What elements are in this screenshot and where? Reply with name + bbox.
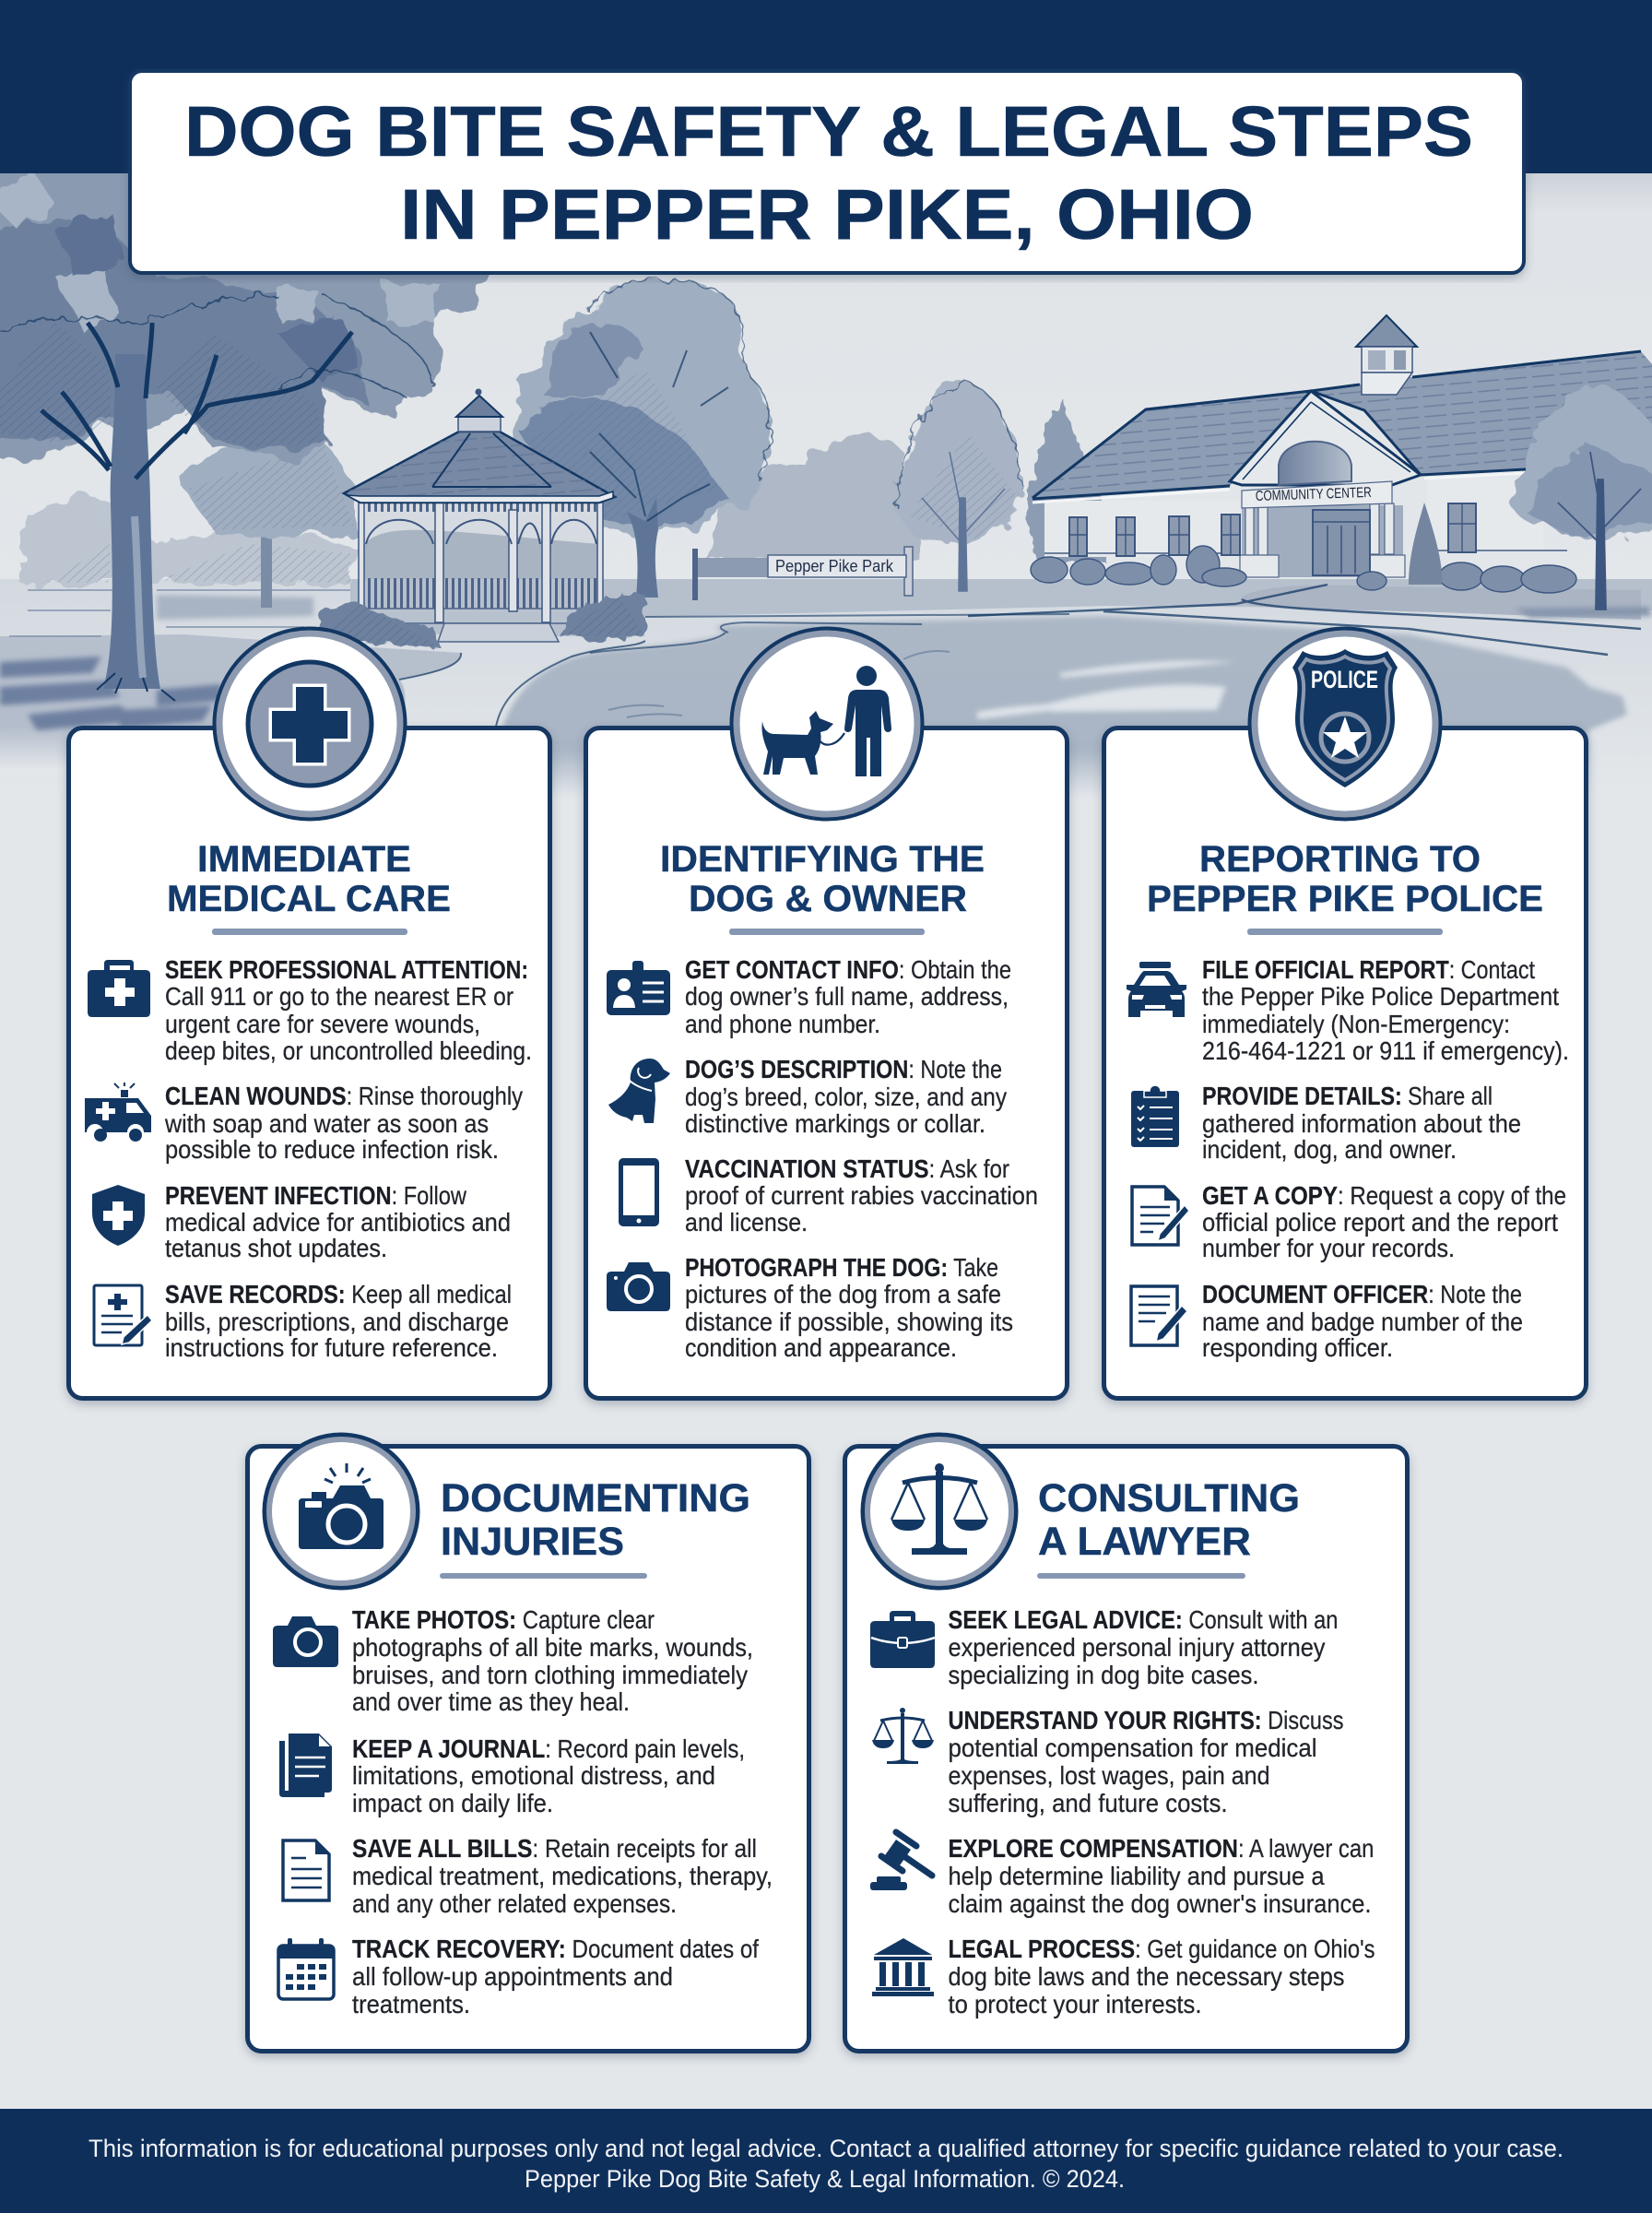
panel: immediate medical care [68, 629, 549, 1398]
item: seek professional attention: SEEK PROFESSIONAL ATTENTION: [165, 955, 528, 984]
item: take photos [273, 1605, 753, 1716]
item: legal process [872, 1935, 1375, 2018]
park sign [692, 547, 913, 600]
item: provide details: PROVIDE DETAILS: Share all [1202, 1082, 1493, 1110]
item: seek legal advice: experienced personal injury attorney [948, 1633, 1326, 1662]
item: save all bills: and any other related expenses. [352, 1889, 677, 1918]
icon: person walking dog badge [732, 629, 922, 819]
item: dog's description [608, 1055, 1007, 1138]
item: explore compensation: help determine liability and pursue a [948, 1862, 1325, 1890]
item: legal process: LEGAL PROCESS: Get guidance on Ohio's [948, 1935, 1375, 1963]
far trees and bushes [20, 397, 1106, 584]
item: document officer: DOCUMENT OFFICER: Note the [1202, 1280, 1522, 1308]
item: dog's description: DOG’S DESCRIPTION: Note the [685, 1055, 1002, 1083]
heading: MEDICAL CARE [167, 879, 451, 919]
item: photograph the dog [607, 1253, 1013, 1362]
heading [660, 839, 985, 935]
item: take photos: photographs of all bite marks, wounds, [352, 1633, 753, 1662]
item: seek legal advice [870, 1605, 1339, 1689]
item: file official report: the Pepper Pike Police Department [1202, 982, 1559, 1011]
heading: A LAWYER [1038, 1520, 1251, 1564]
item: seek professional attention: deep bites, or uncontrolled bleeding. [165, 1036, 532, 1065]
item: keep a journal: limitations, emotional distress, and [352, 1761, 715, 1790]
item: seek professional attention: urgent care for severe wounds, [165, 1010, 480, 1038]
item: clean wounds: with soap and water as soon as [164, 1109, 489, 1138]
panel: reporting to pepper pike police [1104, 629, 1586, 1398]
item: save all bills [283, 1834, 773, 1918]
icon: medical cross badge [215, 629, 405, 819]
item: get a copy: number for your records. [1202, 1234, 1455, 1262]
item: dog's description: distinctive markings or collar. [685, 1109, 985, 1138]
item: save records: SAVE RECORDS: Keep all medical [165, 1280, 512, 1308]
heading: REPORTING TO [1199, 839, 1481, 880]
item: keep a journal: KEEP A JOURNAL: Record pain levels, [352, 1734, 745, 1763]
gazebo [344, 389, 615, 642]
item: take photos: TAKE PHOTOS: Capture clear [352, 1605, 655, 1634]
item: legal process: dog bite laws and the necessary steps [948, 1962, 1344, 1991]
item: save all bills: medical treatment, medications, therapy, [352, 1862, 773, 1890]
header band [0, 0, 1652, 173]
item: save records: instructions for future reference. [165, 1333, 498, 1362]
item: file official report: immediately (Non-Emergency: [1202, 1010, 1510, 1038]
item: understand your rights: expenses, lost wages, pain and [948, 1761, 1270, 1790]
item: seek professional attention [88, 955, 532, 1065]
item: dog's description: dog’s breed, color, size, and any [685, 1083, 1007, 1111]
large center tree [514, 279, 772, 598]
item: vaccination status: and license. [685, 1208, 808, 1237]
icon: camera badge [265, 1435, 418, 1588]
shrubs around the building [1031, 503, 1576, 593]
item: save all bills: SAVE ALL BILLS: Retain receipts for all [352, 1834, 757, 1863]
item: clean wounds [85, 1082, 523, 1164]
icon: police badge: POLICE [1311, 666, 1378, 693]
item: clean wounds: CLEAN WOUNDS: Rinse thoroughly [165, 1082, 523, 1110]
item: track recovery: all follow-up appointments and [352, 1962, 673, 1991]
ground: lawns, road and paths [0, 579, 1652, 802]
icon: police badge [1250, 629, 1440, 819]
tree behind gazebo [184, 432, 355, 608]
footer: This information is for educational purposes only and not legal advice. Contact a qualified attorney for specific guidance related to your case. [88, 2135, 1564, 2162]
heading [440, 1476, 750, 1579]
panel: consulting a lawyer [844, 1435, 1407, 2051]
item: keep a journal: impact on daily life. [352, 1789, 553, 1817]
heading: DOG & OWNER [689, 879, 967, 919]
panel: identifying the dog and owner [586, 629, 1068, 1398]
footer: Pepper Pike Dog Bite Safety & Legal Information. © 2024. [525, 2165, 1125, 2193]
item: file official report: 216-464-1221 or 911 if emergency). [1202, 1036, 1569, 1065]
item: prevent infection: tetanus shot updates. [165, 1234, 387, 1262]
item: photograph the dog: distance if possible, showing its [685, 1308, 1013, 1336]
item: provide details: incident, dog, and owner. [1202, 1135, 1457, 1164]
community center building: COMMUNITY CENTER [1256, 485, 1372, 504]
item: take photos: and over time as they heal. [352, 1687, 630, 1716]
item: file official report [1127, 955, 1569, 1065]
item: get contact info: and phone number. [685, 1010, 880, 1038]
heading: IDENTIFYING THE [660, 839, 985, 880]
panel: documenting injuries [247, 1435, 809, 2051]
item: track recovery [278, 1935, 759, 2018]
item: vaccination status [619, 1154, 1038, 1237]
item: vaccination status: VACCINATION STATUS: Ask for [685, 1154, 1009, 1183]
row tree [896, 382, 1021, 591]
item: seek legal advice: SEEK LEGAL ADVICE: Consult with an [948, 1605, 1339, 1634]
item: understand your rights: potential compensation for medical [948, 1734, 1316, 1762]
item: understand your rights: UNDERSTAND YOUR RIGHTS: Discuss [948, 1706, 1344, 1734]
item: photograph the dog: PHOTOGRAPH THE DOG: Take [685, 1253, 998, 1282]
item: document officer [1131, 1280, 1523, 1362]
item: track recovery: treatments. [352, 1990, 470, 2018]
item: explore compensation [870, 1832, 1374, 1918]
footer [0, 2109, 1652, 2213]
title box [130, 71, 1524, 273]
item: understand your rights: suffering, and future costs. [948, 1789, 1228, 1817]
item: track recovery: TRACK RECOVERY: Document dates of [352, 1935, 759, 1963]
icon: scales of justice badge [863, 1435, 1016, 1588]
item: photograph the dog: pictures of the dog from a safe [685, 1280, 1001, 1308]
item: explore compensation: claim against the dog owner's insurance. [948, 1889, 1372, 1918]
item: get contact info [607, 955, 1011, 1038]
item: provide details: gathered information about the [1202, 1109, 1521, 1138]
item: save records [94, 1280, 512, 1362]
heading [1037, 1476, 1300, 1579]
heading: DOCUMENTING [441, 1476, 750, 1521]
item: legal process: to protect your interests. [948, 1990, 1202, 2018]
heading: PEPPER PIKE POLICE [1147, 879, 1543, 919]
item: file official report: FILE OFFICIAL REPORT: Contact [1202, 955, 1535, 984]
item: vaccination status: proof of current rabies vaccination [685, 1181, 1038, 1210]
gazebo shrubs [313, 594, 645, 647]
item: photograph the dog: condition and appearance. [685, 1333, 957, 1362]
item: document officer: responding officer. [1202, 1333, 1393, 1362]
item: understand your rights [872, 1706, 1344, 1817]
heading: IMMEDIATE [197, 839, 411, 880]
community center building [1032, 315, 1652, 577]
title box: DOG BITE SAFETY & LEGAL STEPS [184, 92, 1473, 172]
heading [1147, 839, 1543, 935]
item: prevent infection: medical advice for antibiotics and [165, 1208, 511, 1237]
item: get a copy [1132, 1181, 1566, 1262]
item: seek legal advice: specializing in dog bite cases. [948, 1661, 1259, 1689]
heading: CONSULTING [1038, 1476, 1300, 1521]
item: save records: bills, prescriptions, and discharge [165, 1308, 509, 1336]
item: provide details [1131, 1082, 1521, 1164]
park sign: Pepper Pike Park [775, 557, 894, 575]
item: prevent infection [92, 1181, 511, 1262]
item: clean wounds: possible to reduce infection risk. [165, 1135, 499, 1164]
item: get a copy: official police report and the report [1202, 1208, 1558, 1237]
item: prevent infection: PREVENT INFECTION: Follow [165, 1181, 466, 1210]
item: get contact info: GET CONTACT INFO: Obtain the [685, 955, 1011, 984]
right tree [1510, 384, 1652, 609]
item: get contact info: dog owner’s full name, address, [685, 982, 1009, 1011]
heading [167, 839, 451, 935]
item: document officer: name and badge number of the [1202, 1308, 1523, 1336]
item: explore compensation: EXPLORE COMPENSATION: A lawyer can [948, 1834, 1374, 1863]
foreground large tree [0, 157, 493, 701]
item: take photos: bruises, and torn clothing immediately [352, 1661, 748, 1689]
item: get a copy: GET A COPY: Request a copy of the [1202, 1181, 1566, 1210]
illustration: Pepper Pike park and community center scene [0, 157, 1652, 802]
item: keep a journal [279, 1734, 745, 1817]
title box: IN PEPPER PIKE, OHIO [400, 175, 1254, 254]
item: seek professional attention: Call 911 or go to the nearest ER or [165, 982, 513, 1011]
heading: INJURIES [441, 1520, 624, 1564]
